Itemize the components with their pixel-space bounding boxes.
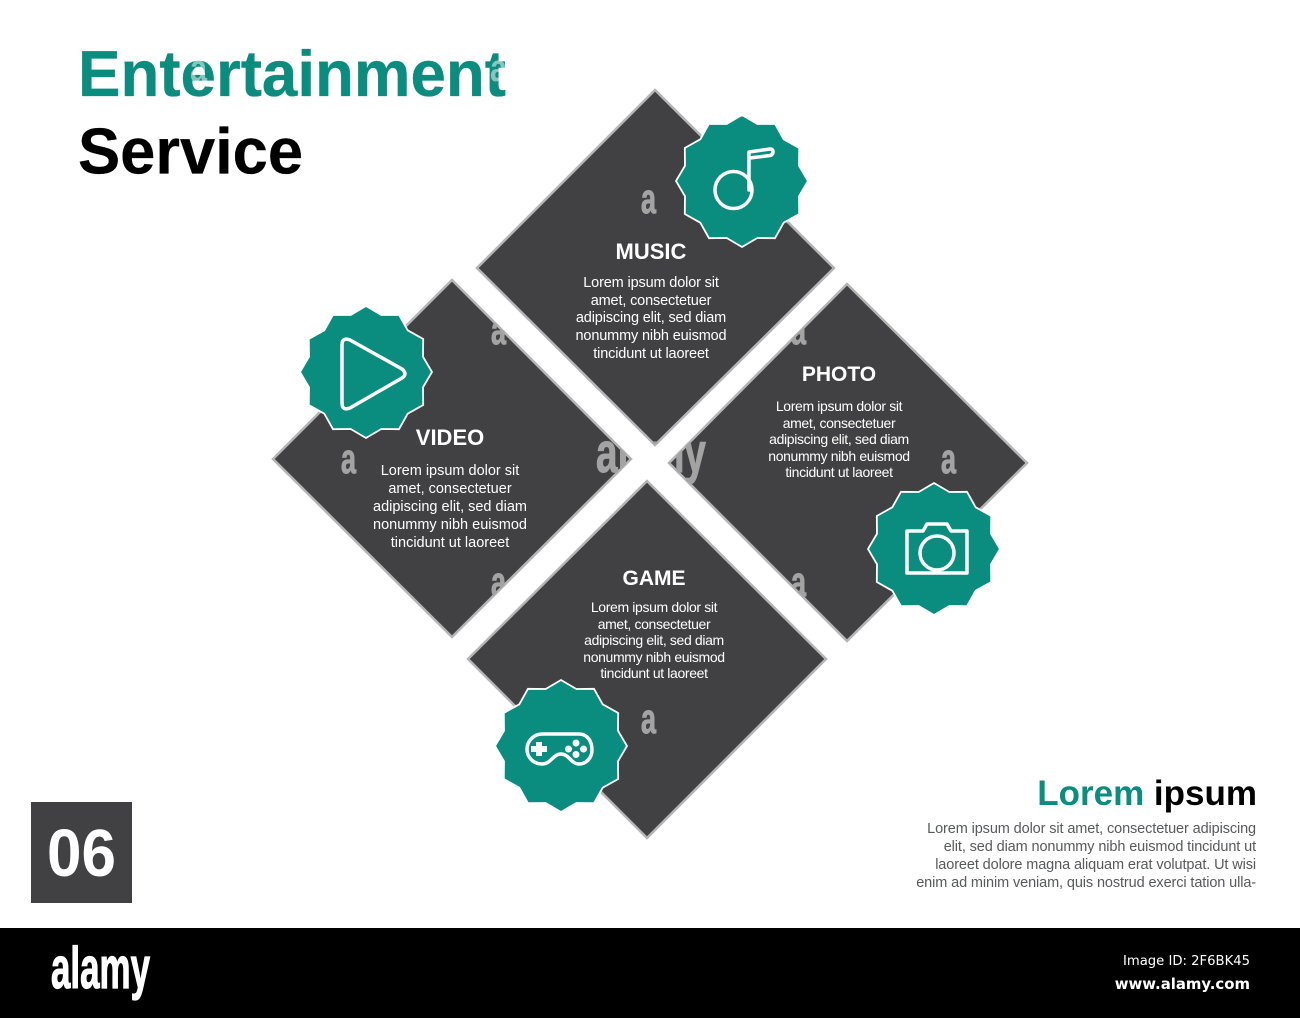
callout text <box>916 821 1256 891</box>
watermark glyphs: a <box>941 435 956 482</box>
game text: Lorem ipsum dolor sit <box>591 599 718 615</box>
panel: photo <box>669 284 1027 641</box>
callout text: Lorem ipsum dolor sit amet, consectetuer adipiscing <box>927 821 1256 837</box>
watermark glyphs: a <box>341 435 356 482</box>
music text: amet, consectetuer <box>591 293 712 309</box>
music heading: MUSIC <box>616 239 687 264</box>
music text: Lorem ipsum dolor sit <box>583 275 719 291</box>
game text: amet, consectetuer <box>598 616 711 632</box>
music text: adipiscing elit, sed diam <box>576 310 726 326</box>
title <box>78 37 508 188</box>
video text: amet, consectetuer <box>388 481 512 497</box>
watermark glyphs <box>341 175 956 742</box>
footer bar <box>0 928 1300 1018</box>
icon: camera badge <box>868 483 1000 615</box>
music text <box>576 275 727 362</box>
game text <box>583 599 725 681</box>
video text <box>373 463 527 551</box>
watermark glyphs: alamy <box>596 421 706 485</box>
game text: tincidunt ut laoreet <box>600 665 708 681</box>
icon: play badge <box>300 306 432 438</box>
photo text: adipiscing elit, sed diam <box>769 431 909 447</box>
video text: adipiscing elit, sed diam <box>373 499 527 515</box>
title: Service <box>78 114 303 188</box>
game text: nonummy nibh euismod <box>583 649 725 665</box>
panel: video <box>273 280 631 637</box>
callout text: elit, sed diam nonummy nibh euismod tincidunt ut <box>944 839 1256 855</box>
watermark glyphs: a <box>491 306 506 353</box>
game heading: GAME <box>622 567 686 590</box>
video text: tincidunt ut laoreet <box>391 535 509 551</box>
callout text: laoreet dolore magna aliquam erat volutpat. Ut wisi <box>935 857 1256 873</box>
photo text <box>768 398 910 480</box>
page number box <box>31 802 132 903</box>
music text: nonummy nibh euismod <box>576 328 727 344</box>
watermark glyphs: a <box>791 558 806 605</box>
music text: tincidunt ut laoreet <box>593 346 709 362</box>
page number box: 06 <box>47 816 116 891</box>
watermark glyphs: a <box>791 306 806 353</box>
icon: music note badge <box>676 115 808 247</box>
callout: lorem ipsum heading: Lorem ipsum <box>1037 774 1257 813</box>
photo text: nonummy nibh euismod <box>768 448 910 464</box>
watermark glyphs: a <box>641 175 656 222</box>
game text: adipiscing elit, sed diam <box>584 632 724 648</box>
video heading: VIDEO <box>416 425 484 450</box>
title: Entertainment <box>78 37 506 110</box>
video text: nonummy nibh euismod <box>373 517 527 533</box>
photo heading: PHOTO <box>802 363 876 386</box>
title: a <box>190 48 208 90</box>
footer logo: alamy <box>51 936 150 1001</box>
website: www.alamy.com <box>1115 975 1250 993</box>
title: a <box>490 48 508 90</box>
callout text: enim ad minim veniam, quis nostrud exerci tation ulla- <box>916 875 1256 891</box>
image id: Image ID: 2F6BK45 <box>1123 954 1250 969</box>
photo text: Lorem ipsum dolor sit <box>776 398 903 414</box>
panel: music <box>477 90 834 445</box>
photo text: tincidunt ut laoreet <box>785 464 893 480</box>
panel: game <box>468 481 826 838</box>
photo text: amet, consectetuer <box>783 415 896 431</box>
icon: gamepad badge <box>495 680 627 812</box>
video text: Lorem ipsum dolor sit <box>381 463 519 479</box>
watermark glyphs: a <box>641 695 656 742</box>
watermark glyphs: a <box>491 558 506 605</box>
